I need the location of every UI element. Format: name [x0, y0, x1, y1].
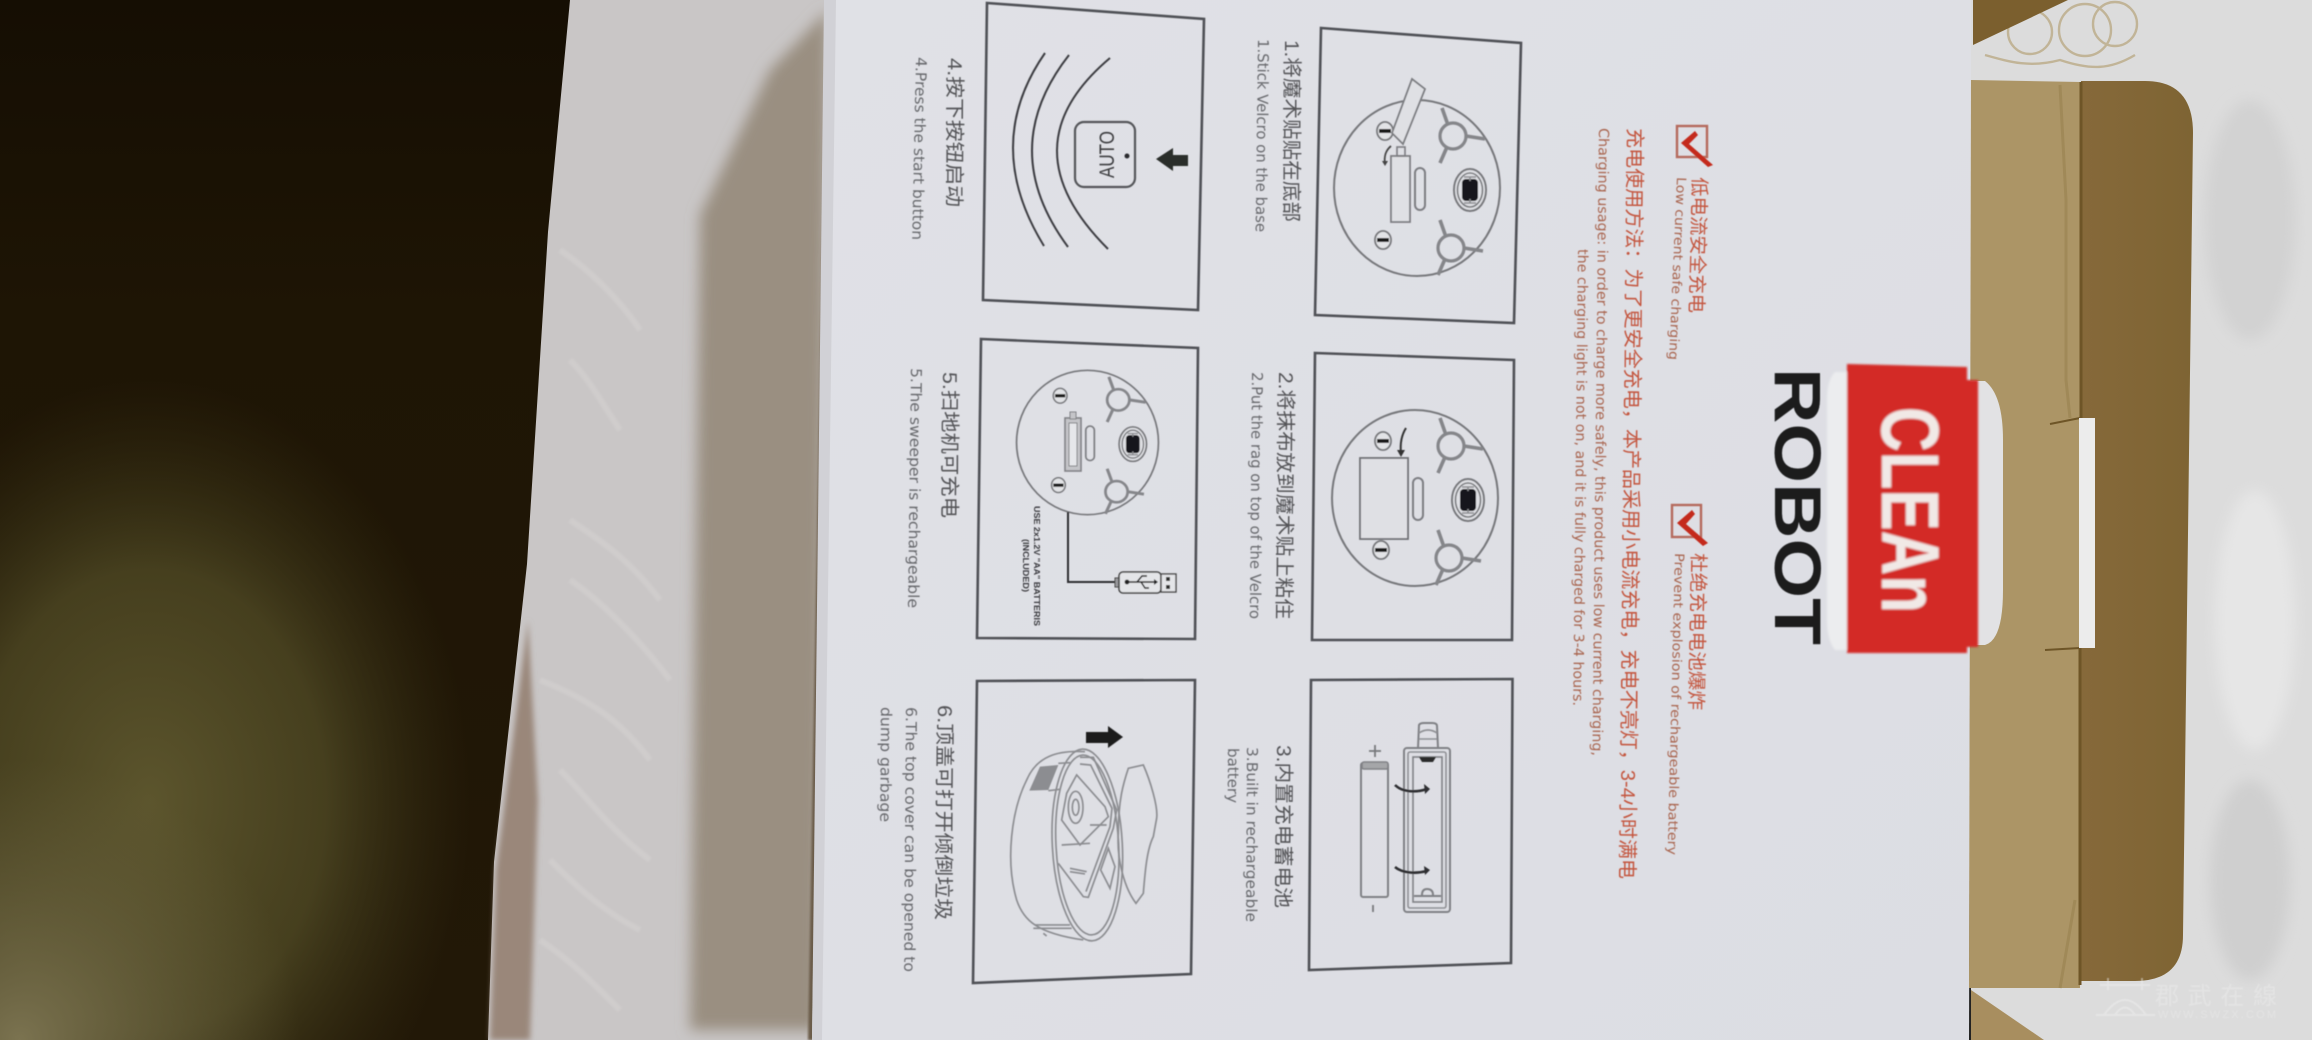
watermark: WWW.SWZX.COM	[2158, 1009, 2276, 1021]
text: step 5 caption: 5.扫地机可充电	[937, 372, 961, 518]
arrow pointing right	[1086, 726, 1123, 748]
white patterned cloth beside the box	[488, 0, 830, 1040]
text: charging usage paragraph: 充电使用方法：为了更安全充电，本产品采用小电流充电，充电不亮灯，3-4小时满电	[1615, 128, 1646, 879]
insertion arrows	[1395, 784, 1430, 875]
brown cardboard corner top	[1973, 0, 2068, 45]
text: step 4 caption: 4.按下按钮启动	[942, 58, 966, 207]
robot with open lid	[1011, 747, 1157, 943]
battery note	[1021, 506, 1041, 627]
text: step 5 caption	[904, 368, 961, 608]
text: step 1 caption: 1.Stick Velcro on the base	[1252, 39, 1272, 232]
text: step 2 caption: 2.将抹布放到魔术贴上粘住	[1272, 372, 1297, 619]
text: prevent explosion: Prevent explosion of rechargeable battery	[1664, 553, 1686, 856]
signal waves	[1013, 53, 1110, 249]
logo: red CLEAn label	[1827, 364, 1978, 653]
text: step 3 caption: 3.Built in rechargeable	[1242, 747, 1261, 922]
battery note: USE 2x1.2V "AA" BATTERIS	[1032, 506, 1041, 627]
text: step 3 caption	[1224, 745, 1295, 922]
rag and arrow	[1360, 428, 1408, 539]
panel: step 6 top cover opens	[973, 680, 1195, 983]
logo: red CLEAn label: CLEAn	[1864, 407, 1955, 613]
text: step 6 caption: 6.顶盖可打开倾倒垃圾	[931, 705, 956, 920]
box shadow falling on the cloth	[690, 10, 828, 1030]
lit box edge	[812, 0, 836, 1040]
loose AA battery	[1361, 745, 1388, 912]
text: low current safe charging	[1665, 177, 1710, 360]
text: step 5 caption: 5.The sweeper is rechargeable	[904, 368, 925, 608]
cloth on right side	[1971, 0, 2312, 1040]
text: step 2 caption: 2.Put the rag on top of the Velcro	[1246, 372, 1266, 619]
text: step 3 caption: 3.内置充电蓄电池	[1271, 745, 1295, 908]
icon: red checkbox two	[1672, 505, 1708, 546]
white box face	[812, 0, 1972, 1040]
arrow pointing to button	[1156, 148, 1188, 171]
AUTO button	[1075, 122, 1135, 187]
text: step 3 caption: battery	[1224, 748, 1242, 803]
text: charging usage paragraph: Charging usage: in order to charge more safely, this product uses low current charging,	[1588, 128, 1611, 756]
panel: step 1 stick velcro	[1315, 28, 1521, 323]
watermark	[2096, 978, 2277, 1021]
text: low current safe charging: 低电流安全充电	[1685, 177, 1710, 313]
AUTO button: AUTO	[1096, 131, 1119, 178]
watermark: 郡武在線	[2155, 983, 2277, 1010]
text: prevent explosion	[1664, 553, 1709, 856]
text: low current safe charging: Low current safe charging	[1665, 177, 1688, 360]
logo: ROBOT wordmark: ROBOT	[1761, 368, 1835, 645]
text: step 1 caption: 1.将魔术贴贴在底部	[1279, 40, 1303, 222]
narrow dark contact shadow at box edge	[808, 30, 830, 1040]
panel: step 2 put rag on velcro	[1312, 353, 1514, 640]
text: charging usage paragraph: the charging light is not on, and it is fully charged for 3-4 hours.	[1569, 249, 1590, 706]
dark blurred background on the left	[0, 0, 600, 1040]
text: step 6 caption: 6.The top cover can be opened to	[900, 707, 920, 972]
panel: step 5 recharge via USB	[977, 339, 1198, 639]
text: step 4 caption: 4.Press the start button	[908, 57, 930, 240]
icon: red checkbox one	[1677, 126, 1713, 167]
text: prevent explosion: 杜绝充电电池爆炸	[1684, 553, 1709, 710]
cardboard flap	[1969, 80, 2193, 988]
battery holder	[1404, 723, 1450, 912]
slot in flap	[2079, 418, 2095, 648]
battery note: (INCLUDED)	[1021, 539, 1030, 592]
text: step 1 caption	[1252, 39, 1303, 232]
robot underside small	[1017, 370, 1158, 515]
text: step 4 caption	[908, 57, 966, 240]
text: charging usage paragraph	[1569, 128, 1646, 879]
robot underside with rag	[1332, 410, 1498, 586]
panel: step 3 battery	[1309, 679, 1512, 970]
installed battery	[1065, 412, 1081, 471]
text: step 6 caption: dump garbage	[876, 707, 895, 822]
text: step 2 caption	[1246, 372, 1297, 619]
velcro strip and door	[1382, 79, 1425, 222]
text: step 6 caption	[876, 705, 956, 972]
robot underside	[1334, 100, 1500, 276]
panel: step 4 press start button	[983, 3, 1204, 310]
golden thread pattern at top right	[1985, 2, 2137, 67]
USB cable and plug	[1068, 512, 1176, 593]
logo: white tab	[1970, 381, 2003, 645]
brown cardboard corner bottom	[1971, 990, 2044, 1040]
